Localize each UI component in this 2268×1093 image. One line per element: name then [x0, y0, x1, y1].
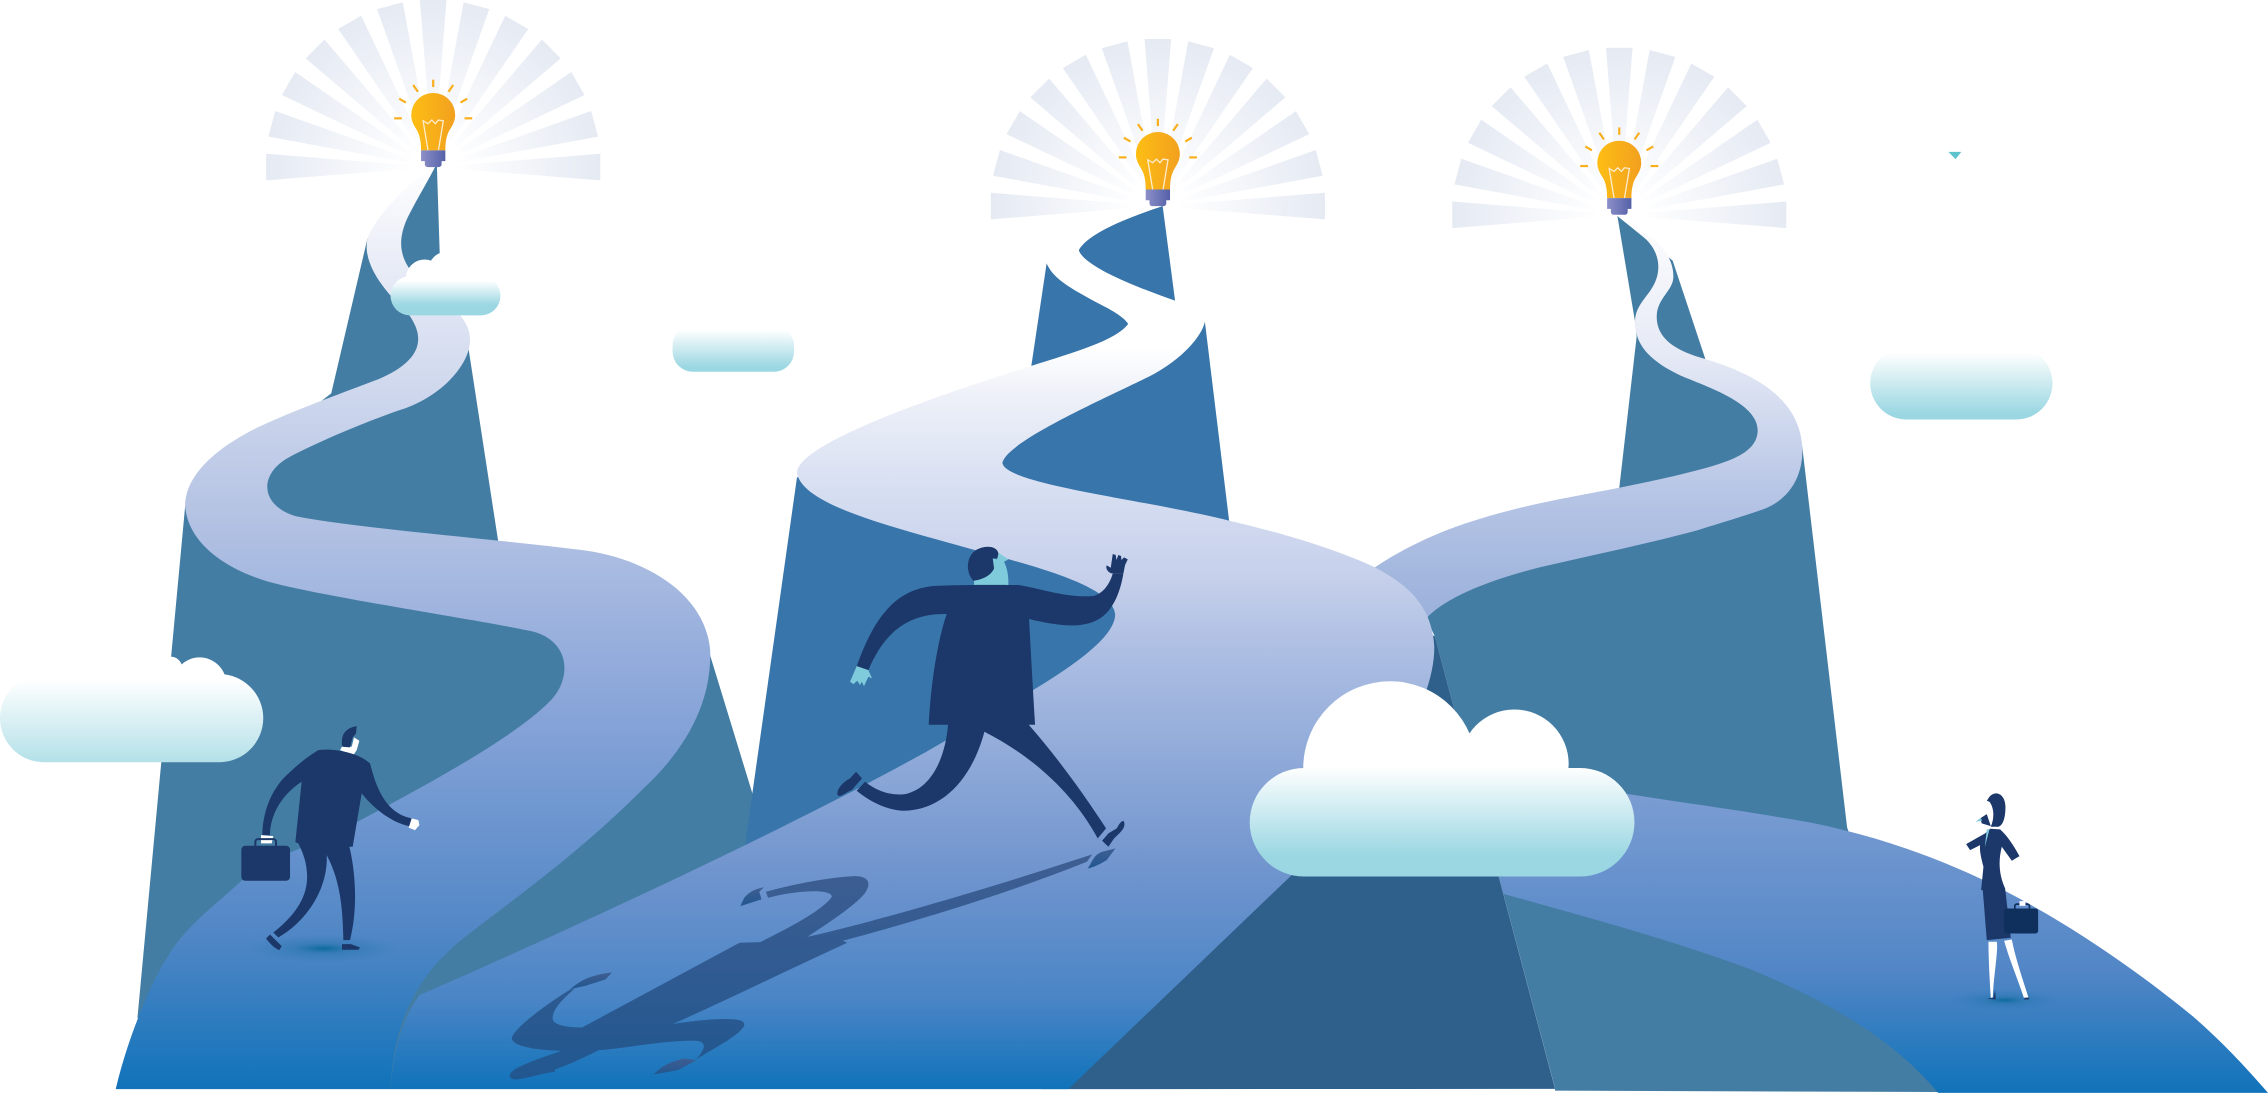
sunburst: centre peak — [991, 39, 1325, 219]
blouse collar — [1985, 829, 1989, 847]
raised hand — [1106, 554, 1128, 573]
mountain: left — [137, 163, 767, 1088]
mountain: centre — [745, 206, 1302, 846]
light bulb: right — [1580, 127, 1658, 215]
cloud: far left — [0, 657, 263, 762]
mountain: right — [1425, 216, 1938, 1092]
light bulb: centre — [1119, 119, 1197, 206]
road: right winding path — [1367, 216, 1802, 625]
shoes — [1987, 990, 2029, 999]
figure: businessman with briefcase — [241, 726, 419, 962]
road: left winding path — [116, 163, 710, 1089]
figure: businesswoman — [1948, 793, 2062, 1011]
jacket and skirt — [1966, 829, 2019, 940]
right hand — [409, 818, 419, 830]
hair — [342, 726, 357, 747]
cloud: small by left peak — [391, 252, 500, 315]
cloud: small centre-left — [673, 325, 794, 372]
left hand — [261, 835, 273, 843]
ground shadow — [1948, 989, 2062, 1011]
sunburst: right peak — [1452, 48, 1786, 228]
dark mountain face under big cloud — [1041, 622, 1555, 1089]
road: centre winding path — [391, 206, 1434, 1089]
runner's long shadow — [510, 848, 1115, 1079]
light bulb: left — [394, 80, 472, 167]
figure: running businessman — [837, 547, 1128, 847]
legs — [1988, 939, 2028, 998]
face and neck — [974, 553, 1008, 586]
ground shadow — [245, 934, 402, 962]
briefcase — [241, 839, 290, 881]
lower hand — [850, 666, 872, 686]
briefcase — [2004, 901, 2038, 933]
suit body, arms and legs — [857, 573, 1123, 838]
suit — [262, 750, 412, 940]
hair — [1987, 793, 2005, 827]
shoes — [266, 934, 360, 950]
sunburst: left peak — [266, 0, 600, 180]
scarf fleck — [1975, 818, 1982, 822]
hill: right foreground slope — [1498, 785, 2268, 1093]
collar shadow — [1980, 814, 1991, 826]
rear shoe — [837, 772, 862, 796]
tiny teal mark in sky — [1948, 152, 1961, 159]
front shoe — [1102, 821, 1124, 847]
cloud: large centre — [1250, 681, 1634, 877]
hair — [968, 547, 998, 581]
collar — [340, 737, 359, 755]
cloud: far right — [1870, 347, 2052, 419]
